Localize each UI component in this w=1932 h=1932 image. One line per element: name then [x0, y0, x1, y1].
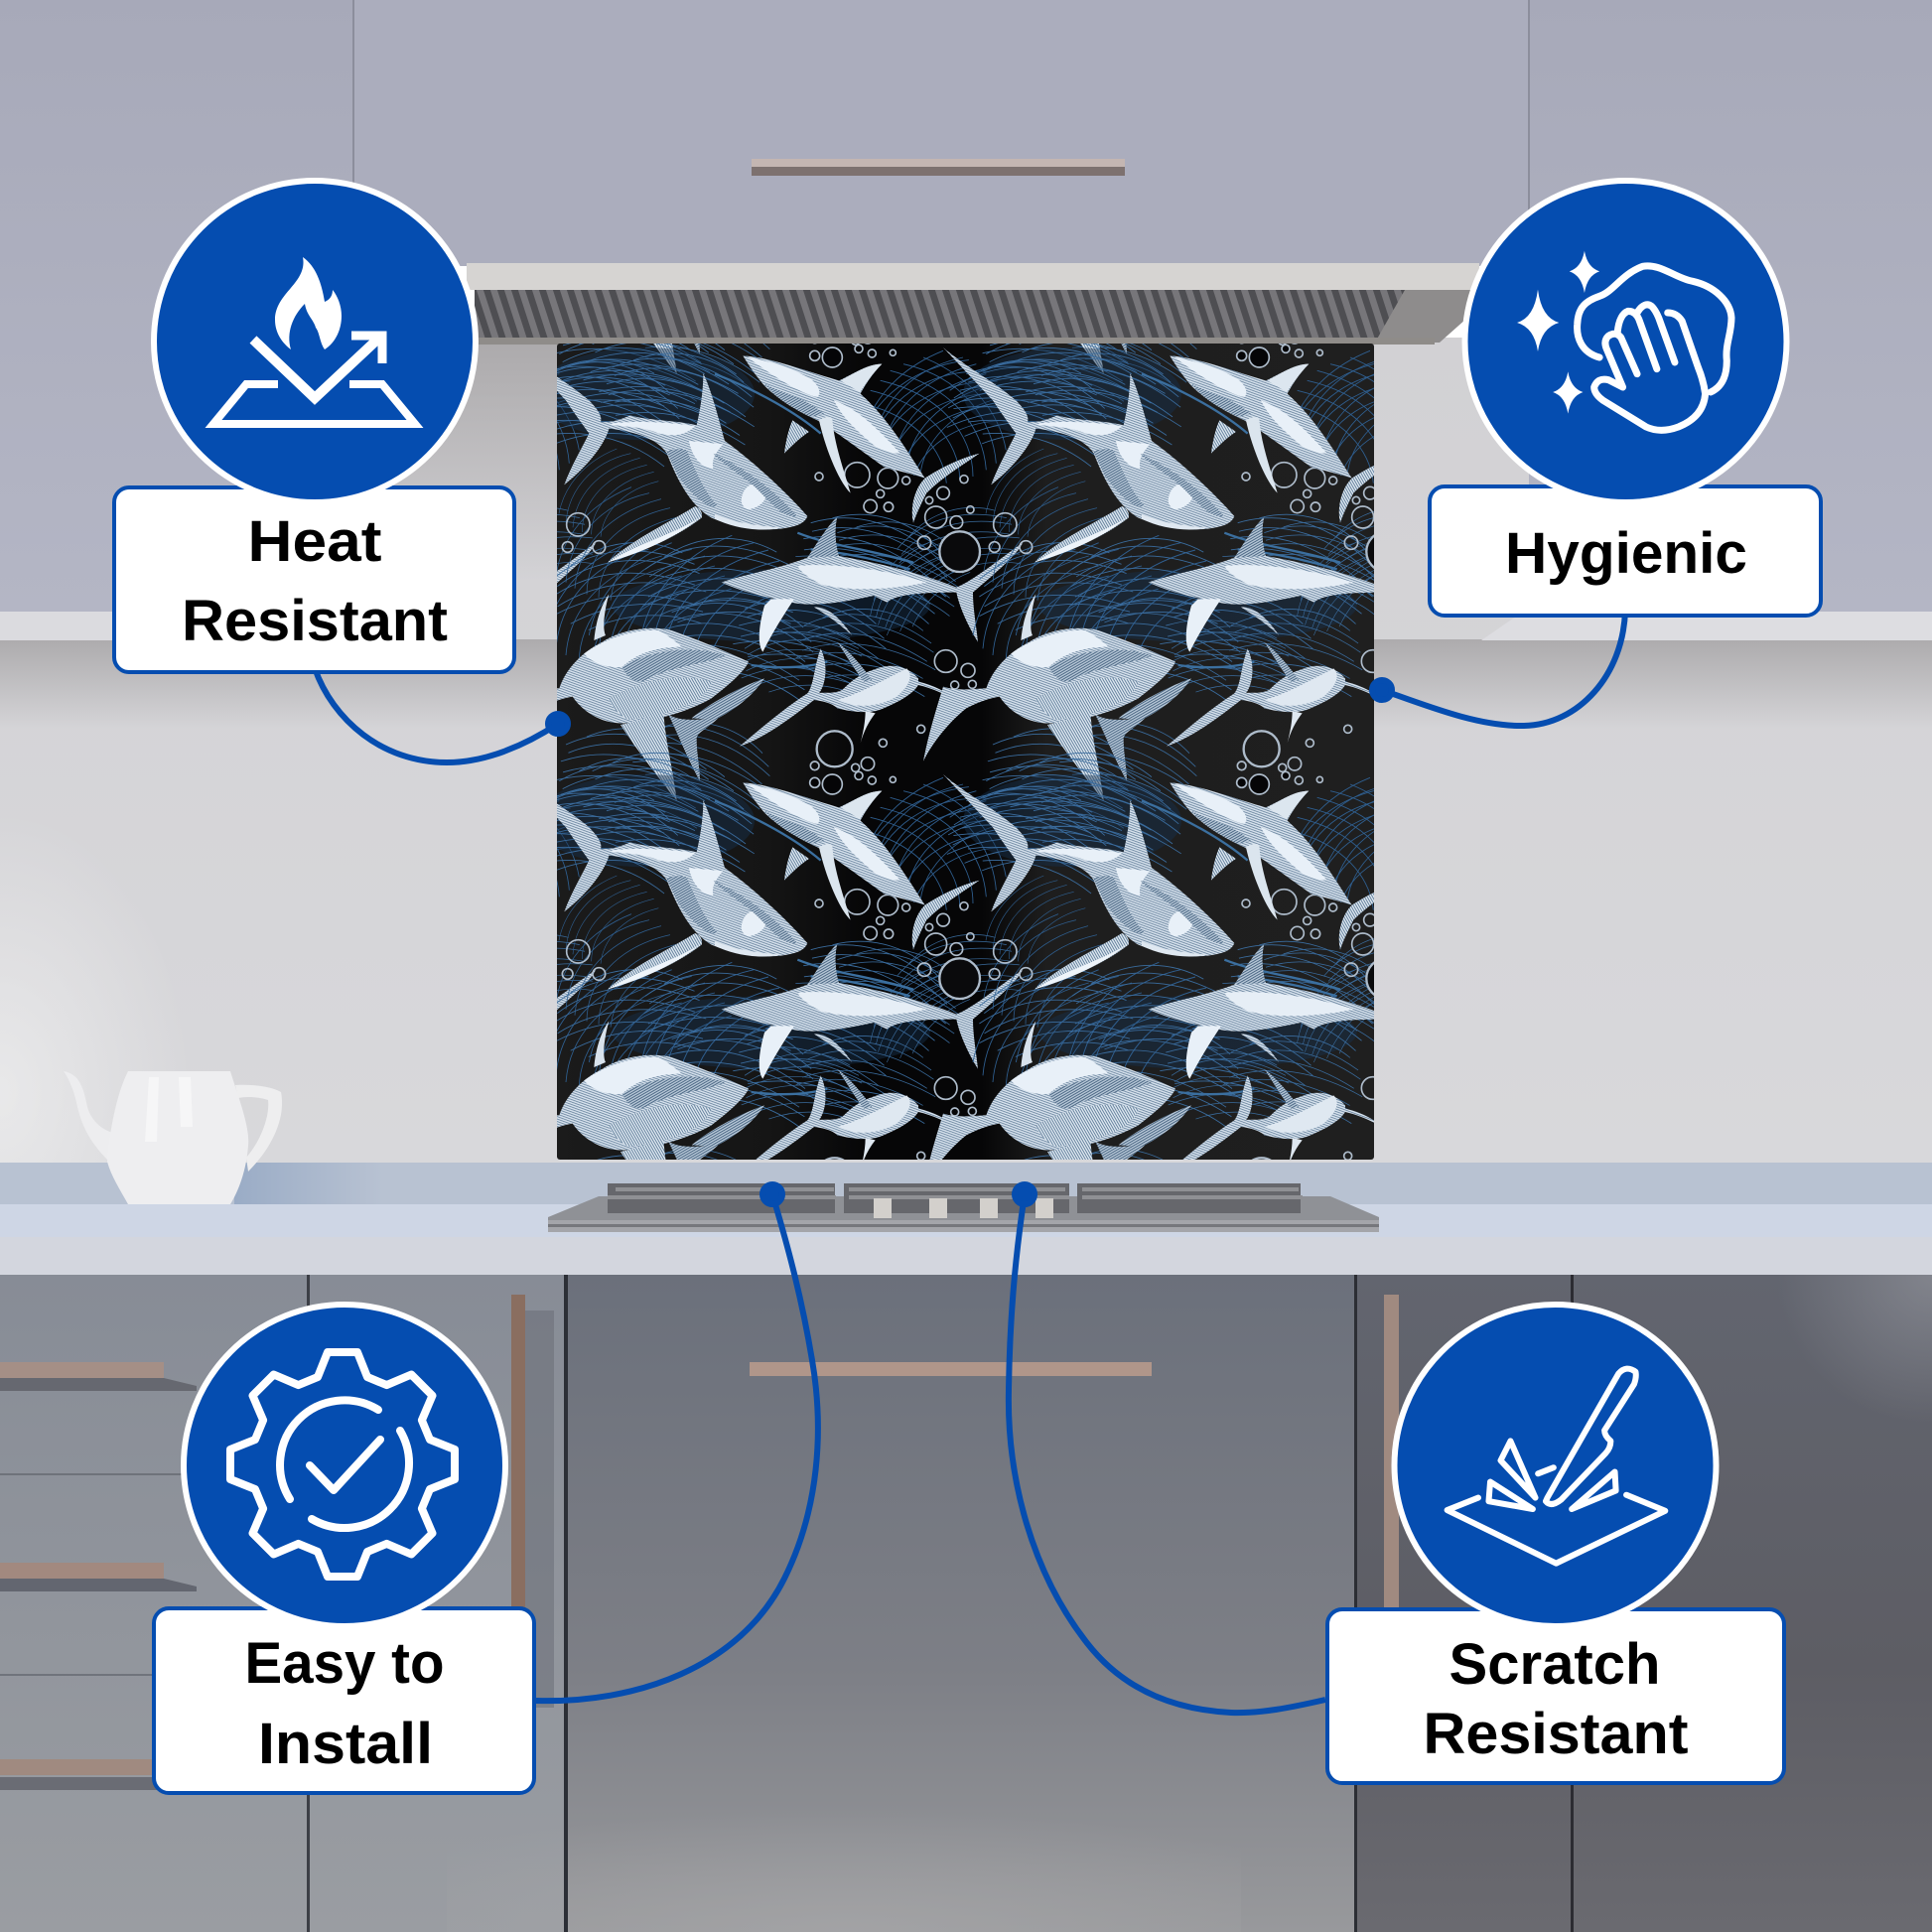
callout: heat resistant — [114, 181, 514, 672]
label box — [114, 487, 514, 672]
cabinet handles — [0, 1295, 1399, 1790]
text: Easy to Install: Easy to — [244, 1631, 445, 1696]
label box — [1430, 486, 1821, 616]
badge circle — [1465, 181, 1787, 502]
callout: scratch resistant — [1327, 1305, 1784, 1783]
callout: easy to install — [154, 1305, 534, 1793]
upper cabinets — [0, 0, 1932, 640]
text: Scratch Resistant: Scratch — [1449, 1632, 1660, 1697]
connector: heat resistant — [315, 668, 568, 762]
icon: gear with check mark — [230, 1352, 455, 1577]
badge circle — [184, 1305, 505, 1626]
text: Hygienic: Hygienic — [1505, 521, 1747, 586]
label box — [154, 1608, 534, 1793]
callout: easy to install: Install — [258, 1712, 433, 1776]
teapot — [64, 1071, 282, 1204]
icon: hand wiping with sparkles — [1517, 251, 1731, 430]
connector: easy to install — [536, 1184, 818, 1701]
badge circle — [1394, 1305, 1716, 1626]
icon: knife scratching a surface — [1448, 1369, 1665, 1564]
extractor hood — [467, 263, 1484, 345]
icon: flame over surface with deflect arrow — [213, 257, 415, 424]
callout: hygienic — [1430, 181, 1821, 616]
lower cabinets — [0, 1275, 1932, 1932]
text: Heat Resistant: Heat — [248, 509, 381, 574]
top cabinet handle — [752, 159, 1125, 176]
connector: scratch resistant — [1009, 1184, 1325, 1713]
wall — [0, 338, 1932, 1164]
cooktop — [548, 1183, 1379, 1232]
badge circle — [154, 181, 476, 502]
connector: hygienic — [1372, 611, 1625, 726]
countertop — [0, 1163, 1932, 1275]
callout: heat resistant: Resistant — [182, 589, 448, 653]
label box — [1327, 1609, 1784, 1783]
panel: shark pattern splashback — [557, 344, 1374, 1160]
callout: scratch resistant: Resistant — [1424, 1702, 1688, 1766]
